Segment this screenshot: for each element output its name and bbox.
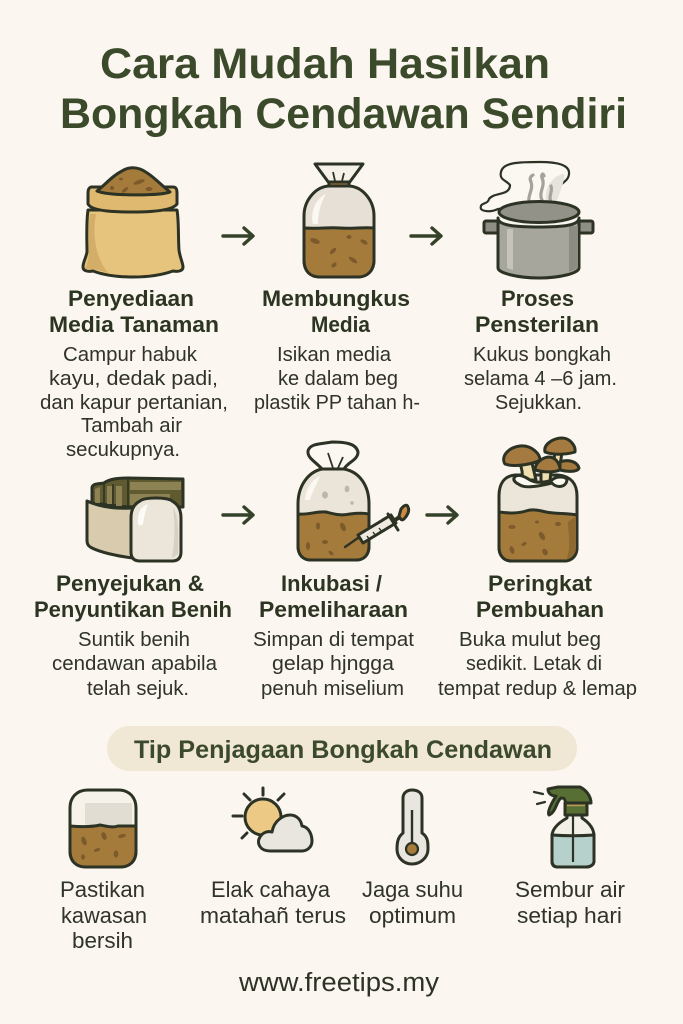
text block: setiap hari	[517, 903, 622, 928]
heading	[475, 286, 599, 337]
text block: matahañ terus	[200, 903, 346, 928]
title: Bongkah Cendawan Sendiri	[60, 90, 627, 138]
heading	[34, 571, 232, 622]
text block: Buka mulut beg	[459, 629, 601, 651]
text block	[254, 344, 420, 414]
panel: step 6 peringkat pembuahan	[438, 438, 637, 700]
panel: tip clean area	[60, 790, 147, 953]
text block: telah sejuk.	[87, 678, 189, 700]
heading: Penyediaan	[68, 286, 194, 311]
text block: kayu, dedak padi,	[49, 368, 218, 390]
icon: block with mushrooms	[499, 438, 579, 561]
text block	[40, 344, 228, 461]
panel: step 1 penyediaan media tanaman	[40, 168, 228, 461]
heading	[262, 286, 410, 337]
heading	[49, 286, 219, 337]
text block: gelap hjngga	[272, 653, 395, 675]
text block	[60, 877, 147, 953]
heading: Penyuntikan Benih	[34, 597, 232, 622]
website footer: www.freetips.my	[238, 969, 439, 997]
text block: selama 4 –6 jam.	[464, 368, 617, 390]
text block: Sejukkan.	[495, 392, 582, 414]
tips heading: Tip Penjagaan Bongkah Cendawan	[134, 736, 552, 764]
heading: Membungkus	[262, 286, 410, 311]
text block: tempat redup & lemap	[438, 678, 637, 700]
text block: plastik PP tahan h-	[254, 392, 420, 414]
icon: sun and cloud	[233, 788, 312, 851]
heading: Penyejukan &	[56, 571, 204, 596]
text block: Elak cahaya	[211, 877, 331, 902]
heading: Proses	[501, 286, 574, 311]
text block: Simpan di tempat	[253, 629, 414, 651]
text block	[515, 877, 625, 928]
icon: cooling box with block	[87, 478, 183, 561]
heading: Pembuahan	[476, 597, 604, 622]
heading: Media	[311, 312, 370, 337]
panel: step 4 penyejukan dan penyuntikan benih	[34, 478, 232, 700]
text block	[362, 877, 463, 928]
heading: Pemeliharaan	[259, 597, 408, 622]
icon: tied bag of media	[304, 164, 374, 277]
icon: mushroom block	[70, 790, 136, 867]
text block: cendawan apabila	[52, 653, 218, 675]
panel: step 5 inkubasi	[253, 442, 414, 700]
heading: Media Tanaman	[49, 312, 219, 337]
panel: step 3 proses pensterilan	[464, 162, 617, 414]
text block: kawasan	[61, 903, 147, 928]
text block: secukupnya.	[66, 439, 180, 461]
icon: bag with syringe	[298, 442, 409, 560]
text block	[438, 629, 637, 700]
text block: Pastikan	[60, 877, 145, 902]
icon: steaming pot	[481, 162, 593, 278]
text block	[52, 629, 218, 700]
heading: Inkubasi /	[281, 571, 383, 596]
text block	[464, 344, 617, 414]
tips heading	[107, 726, 577, 771]
text block: ke dalam beg	[278, 368, 398, 390]
arrow	[411, 228, 441, 244]
heading	[259, 571, 408, 622]
heading: Peringkat	[488, 571, 593, 596]
text block: Suntik benih	[78, 629, 190, 651]
text block: Campur habuk	[63, 344, 198, 366]
arrow	[223, 228, 253, 244]
panel: step 2 membungkus media	[254, 164, 420, 414]
panel: tip spray water	[515, 787, 625, 928]
text block	[253, 629, 414, 700]
panel: tip avoid direct sunlight	[200, 788, 346, 928]
text block: Kukus bongkah	[473, 344, 611, 366]
text block: penuh miselium	[261, 678, 404, 700]
title: Cara Mudah Hasilkan	[100, 40, 550, 88]
heading	[476, 571, 604, 622]
icon: sack of growing media	[83, 168, 183, 277]
text block: Jaga suhu	[362, 877, 463, 902]
arrow	[427, 507, 457, 523]
icon: thermometer	[397, 790, 428, 864]
text block: Tambah air	[81, 415, 182, 437]
panel: tip optimum temperature	[362, 790, 463, 928]
icon: spray bottle	[534, 787, 594, 867]
text block: sedikit. Letak di	[466, 653, 602, 675]
text block: Isikan media	[277, 344, 392, 366]
text block: Sembur air	[515, 877, 625, 902]
text block: dan kapur pertanian,	[40, 392, 228, 414]
arrow	[223, 507, 253, 523]
heading: Pensterilan	[475, 312, 599, 337]
text block: optimum	[369, 903, 456, 928]
title	[60, 40, 627, 138]
text block: bersih	[72, 928, 133, 953]
text block	[200, 877, 346, 928]
